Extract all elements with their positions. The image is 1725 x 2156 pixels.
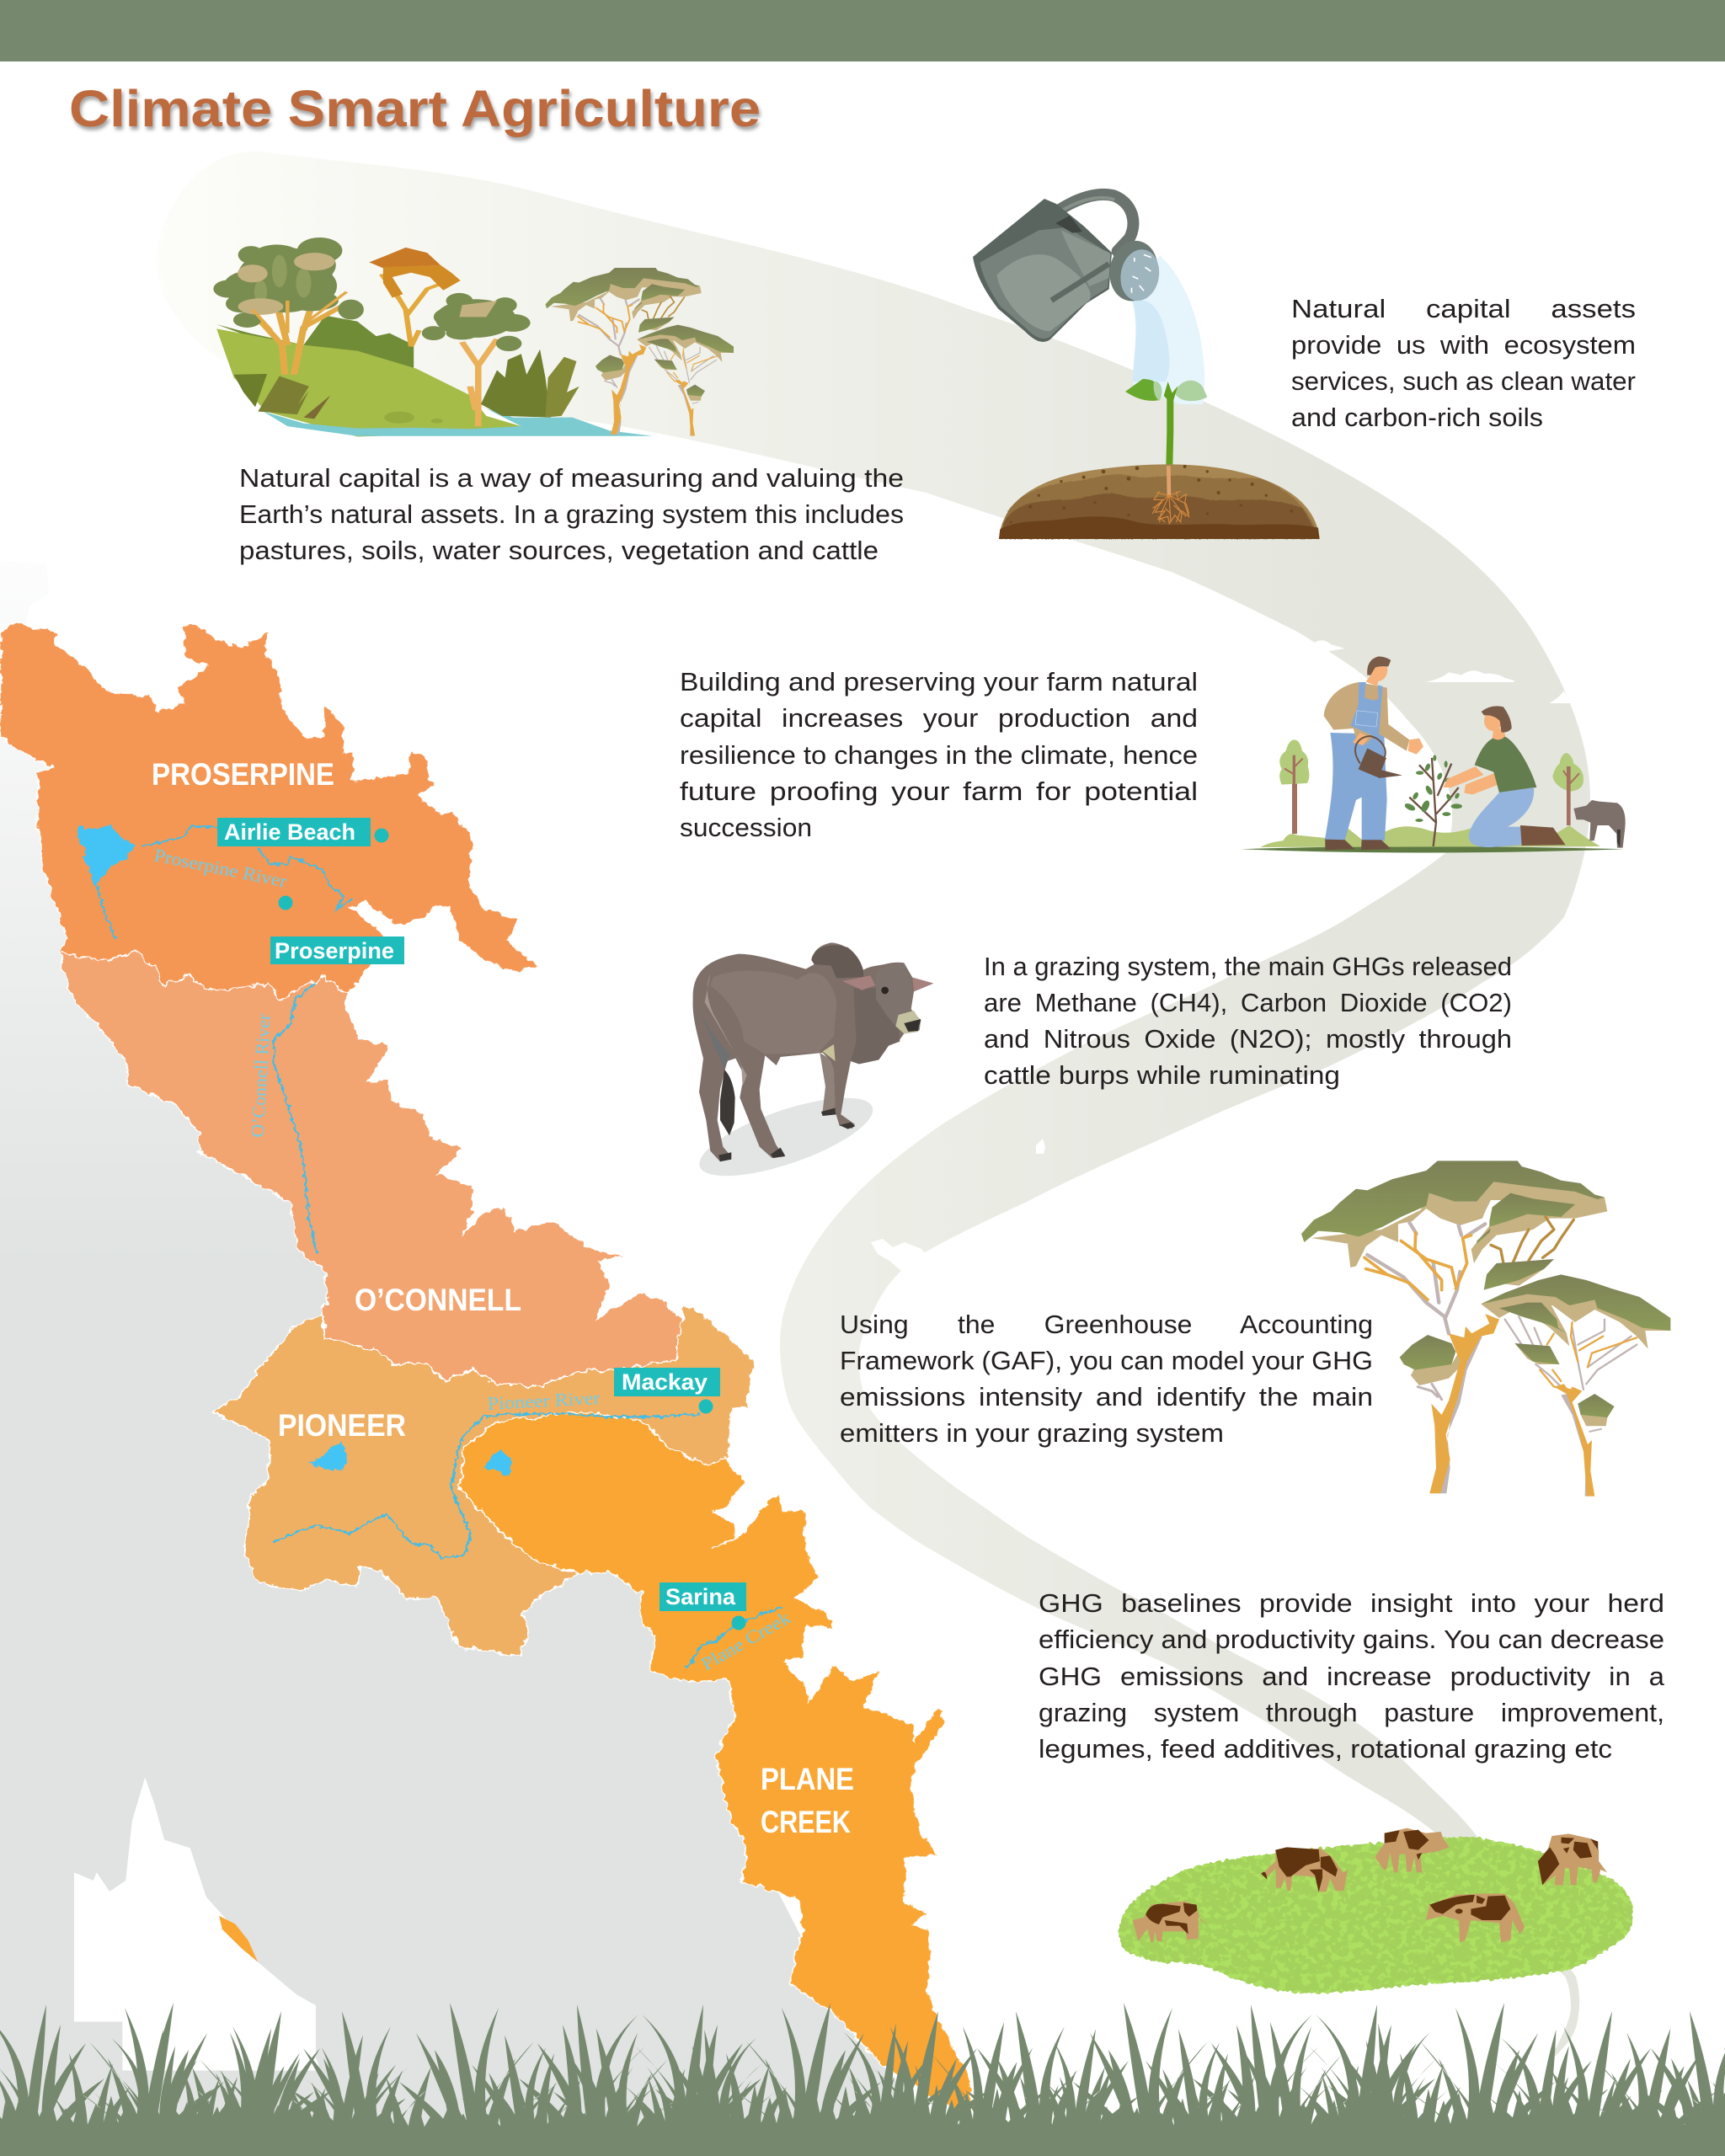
text: ecosystem services: and carbon-rich soils [1291, 403, 1543, 432]
foreground spiky plants [234, 374, 267, 407]
town label: Sarina [660, 1582, 746, 1630]
rose [1105, 237, 1162, 305]
left tree [1279, 739, 1309, 834]
eucalypt tree: trunk [260, 280, 341, 375]
body outline [693, 942, 933, 1161]
map backdrop: surrounding land [0, 560, 943, 2131]
orange tree [382, 274, 443, 346]
text: building natural capital [680, 667, 1198, 842]
grass footer [0, 2003, 1725, 2156]
town label: Sarina: Sarina [665, 1584, 736, 1609]
catchment map: Plane Creek [697, 1607, 794, 1674]
text: GHG baselines: legumes, feed additives, rotational grazing etc [1039, 1734, 1612, 1764]
lower brace [1051, 264, 1109, 301]
text: greenhouse accounting framework: emitters in your grazing system [840, 1418, 1224, 1448]
region name: PLANE CREEK: PLANE [761, 1762, 854, 1796]
text: ecosystem services: Natural capital assets [1291, 294, 1636, 323]
small bull [1573, 800, 1626, 848]
acacia pair [545, 268, 734, 436]
soil mound [999, 464, 1320, 539]
lakes [77, 824, 512, 1476]
right tree [1552, 753, 1583, 825]
seedling stem [1169, 398, 1170, 466]
water [264, 408, 653, 436]
region name: PLANE CREEK: CREEK [761, 1805, 851, 1839]
bright hill [216, 328, 521, 436]
text: ecosystem services [1291, 294, 1636, 432]
rivers [97, 827, 783, 1669]
region name: PROSERPINE: PROSERPINE [152, 757, 334, 792]
eucalypt tree: canopy [213, 237, 364, 328]
seedling leaves [1125, 379, 1161, 401]
region name: O'CONNELL: O’CONNELL [355, 1283, 521, 1317]
footer bar [0, 2128, 1725, 2156]
pasture [1119, 1837, 1632, 1993]
dark hill [216, 316, 414, 369]
white cloud marks on ribbon [871, 1139, 1045, 1279]
grassy hills [1261, 825, 1600, 847]
town label: Proserpine [270, 896, 404, 964]
catchment map: Pioneer River [487, 1387, 601, 1414]
header bar [0, 0, 1725, 61]
town label: Proserpine: Proserpine [275, 938, 394, 963]
illustration: cattle on pasture [1119, 1828, 1632, 1993]
handle [1040, 195, 1133, 251]
ground [1241, 846, 1624, 852]
text: building natural capital: succession [680, 813, 812, 842]
watering can [1355, 736, 1402, 778]
region: Plane Creek [461, 1412, 973, 2125]
text: natural capital definition: Earth’s natural assets. In a grazing system this includes [239, 499, 904, 529]
ground shadow [692, 1082, 881, 1192]
text: ecosystem services: provide us with ecosystem [1291, 330, 1636, 360]
text: GHG baselines: GHG emissions and increase productivity in a [1039, 1662, 1665, 1691]
town label: Mackay: Mackay [622, 1369, 708, 1395]
region: Pioneer [212, 1305, 754, 1656]
second eucalypt [462, 339, 497, 426]
can body [973, 199, 1112, 342]
catchment map: O’Connell River [247, 1012, 275, 1138]
taproot and roots [1162, 466, 1175, 497]
far leg [820, 1053, 836, 1112]
region: Proserpine [0, 622, 537, 1001]
illustration: acacia trees [1301, 1161, 1670, 1497]
cow 1 [1133, 1901, 1208, 1942]
region name: PLANE CREEK [761, 1762, 854, 1839]
cow 3 [1375, 1828, 1450, 1872]
cow 4 [1538, 1833, 1607, 1885]
text: GHG baselines: GHG baselines provide insight into your herd [1039, 1588, 1664, 1618]
map regions [0, 622, 973, 2125]
flank shade [699, 1011, 730, 1070]
text: greenhouse gases: and Nitrous Oxide (N2O); mostly through [984, 1024, 1512, 1054]
region: O'Connell [59, 950, 683, 1387]
town label: Airlie Beach: Airlie Beach [224, 819, 355, 845]
text: natural capital definition: Natural capital is a way of measuring and valuing the [239, 463, 904, 493]
spiky bush [481, 350, 551, 418]
illustration: natural landscape [213, 237, 734, 436]
clouds [1314, 640, 1571, 703]
illustration: farmers planting a tree [1241, 640, 1626, 852]
man [1324, 656, 1423, 850]
hump shade [811, 945, 863, 979]
text: greenhouse gases: are Methane (CH4), Carbon Dioxide (CO2) [984, 988, 1512, 1017]
inset locator map: Queensland [74, 1778, 320, 2070]
winding pathway ribbon [156, 152, 1590, 2063]
sapling [1404, 755, 1462, 846]
illustration: Brahman cattle [692, 942, 933, 1192]
woman [1443, 706, 1566, 847]
river labels: Proserpine River [152, 844, 289, 892]
text: greenhouse accounting framework [840, 1310, 1373, 1448]
ears [842, 975, 875, 990]
text: greenhouse accounting framework: emissions intensity and identify the main [840, 1382, 1373, 1412]
catchment map [0, 622, 973, 2125]
text: natural capital definition: pastures, soils, water sources, vegetation and cattle [239, 536, 879, 565]
title: Climate Smart Agriculture [69, 80, 761, 137]
hooves [718, 1123, 855, 1161]
head [876, 963, 921, 1033]
lakes and rivers [77, 824, 783, 1669]
text: greenhouse gases [984, 952, 1512, 1090]
text: building natural capital: future proofing your farm for potential [680, 776, 1198, 806]
town label: Mackay [614, 1368, 720, 1413]
text: greenhouse gases: In a grazing system, the main GHGs released [984, 952, 1512, 981]
illustration: watering can and seedling [973, 195, 1320, 539]
text: building natural capital: Building and preserving your farm natural [680, 667, 1198, 696]
tail [720, 1070, 735, 1135]
water stream [1131, 255, 1204, 404]
cow 2 [1261, 1847, 1348, 1892]
text: GHG baselines [1039, 1588, 1665, 1764]
cow 5 [1426, 1893, 1525, 1943]
text: GHG baselines: efficiency and productivity gains. You can decrease [1039, 1625, 1664, 1654]
text: greenhouse gases: cattle burps while ruminating [984, 1060, 1340, 1090]
text: natural capital definition [239, 463, 904, 565]
region name: PIONEER: PIONEER [278, 1408, 406, 1443]
body light patch [710, 971, 836, 1054]
text: greenhouse accounting framework: Using the Greenhouse Accounting [840, 1310, 1373, 1339]
grass tufts [0, 2003, 1725, 2131]
text: greenhouse accounting framework: Framework (GAF), you can model your GHG [840, 1346, 1373, 1375]
text: building natural capital: capital increases your production and [680, 703, 1198, 733]
text: building natural capital: resilience to changes in the climate, hence [680, 740, 1198, 770]
text: GHG baselines: grazing system through pasture improvement, [1039, 1698, 1664, 1727]
town label: Airlie Beach [217, 818, 389, 846]
text: ecosystem services: services, such as clean water [1291, 366, 1636, 396]
dewlap and neck [851, 988, 900, 1064]
